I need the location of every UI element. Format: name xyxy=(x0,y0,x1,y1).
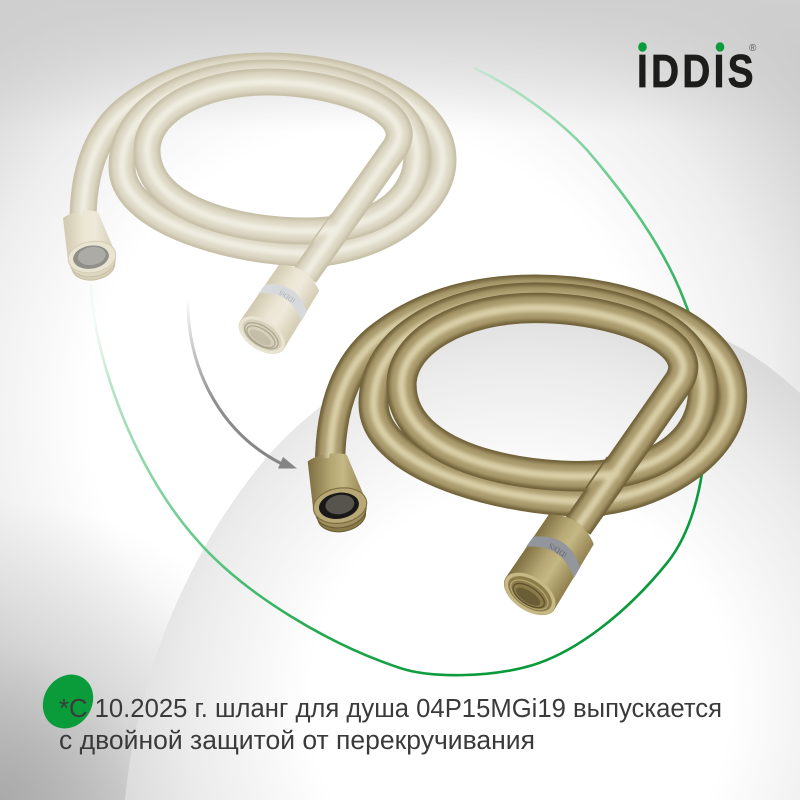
footnote text: *С 10.2025 г. шланг для душа 04P15MGi19 выпускается xyxy=(59,695,722,723)
footnote text: с двойной защитой от перекручивания xyxy=(59,727,535,755)
gold right fitting xyxy=(496,506,601,624)
registered mark: ® xyxy=(749,43,757,54)
right fitting: iDDiS xyxy=(277,288,297,305)
hose inner loop and straight tube xyxy=(147,82,399,275)
gold hose middle loop xyxy=(374,298,703,501)
background circle shape xyxy=(125,312,800,800)
footnote text xyxy=(59,695,722,755)
green blob xyxy=(33,665,103,738)
gold hose xyxy=(308,290,732,624)
gold hose inner loop and straight tube xyxy=(401,308,683,526)
gold hose outer loop xyxy=(330,290,732,501)
logo: IDDIS xyxy=(637,46,757,97)
logo dot 2 xyxy=(716,42,724,52)
green orbit line xyxy=(91,68,705,675)
right fitting xyxy=(232,257,325,362)
gold right fitting: iDDiS xyxy=(547,541,569,560)
left fitting xyxy=(63,211,118,283)
hose middle loop xyxy=(122,73,417,253)
hose outer loop xyxy=(83,66,443,253)
gold left fitting xyxy=(308,453,369,535)
arrow xyxy=(188,297,297,468)
logo dot 1 xyxy=(638,42,647,52)
pale hose xyxy=(63,66,443,362)
